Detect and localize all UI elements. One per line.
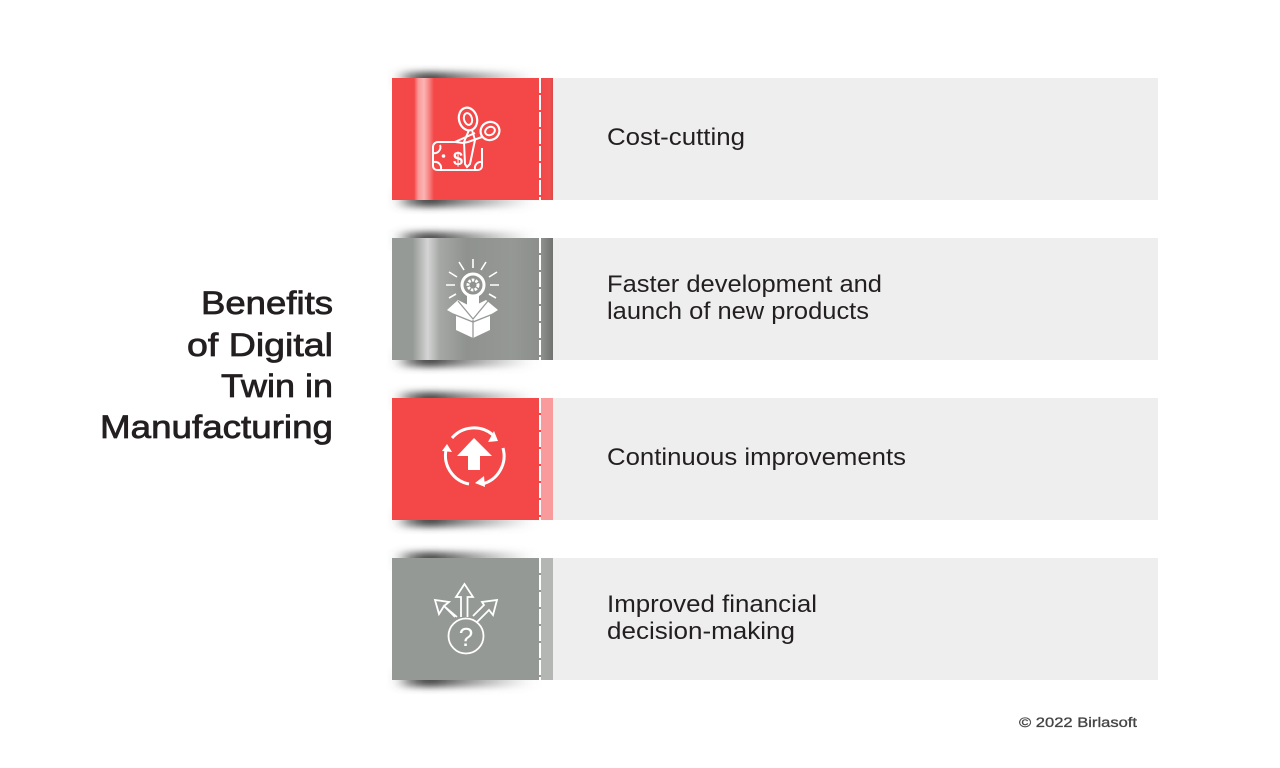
icon: arrows and question mark: ? xyxy=(459,622,473,652)
icon: arrows and question mark xyxy=(435,584,497,654)
text: continuous improvements: Continuous improvements xyxy=(607,444,906,471)
icon: scissors cutting money: $ xyxy=(453,149,463,169)
text: cost-cutting: Cost-cutting xyxy=(607,124,745,151)
text: faster development xyxy=(607,271,882,325)
icon: light bulb in open box xyxy=(446,259,499,339)
text: faster development: Faster development and xyxy=(607,271,882,298)
text: financial decision-making: Improved financial xyxy=(607,591,817,618)
panel: faster development xyxy=(392,232,1158,367)
panel: cost-cutting xyxy=(392,72,1158,207)
text: financial decision-making xyxy=(607,591,817,645)
panel: continuous improvements xyxy=(392,392,1158,527)
title: of Digital xyxy=(187,327,333,363)
icon: scissors cutting money xyxy=(433,106,502,170)
icon: circular arrows with up arrow xyxy=(442,428,504,487)
title: Twin in xyxy=(221,368,333,404)
title: Benefits xyxy=(201,285,333,321)
text: financial decision-making: decision-making xyxy=(607,618,795,645)
title xyxy=(100,285,333,445)
copyright: © 2022 Birlasoft xyxy=(1019,715,1137,730)
panel: financial decision-making xyxy=(392,552,1158,687)
text: faster development: launch of new products xyxy=(607,298,869,325)
title: Manufacturing xyxy=(100,409,333,445)
